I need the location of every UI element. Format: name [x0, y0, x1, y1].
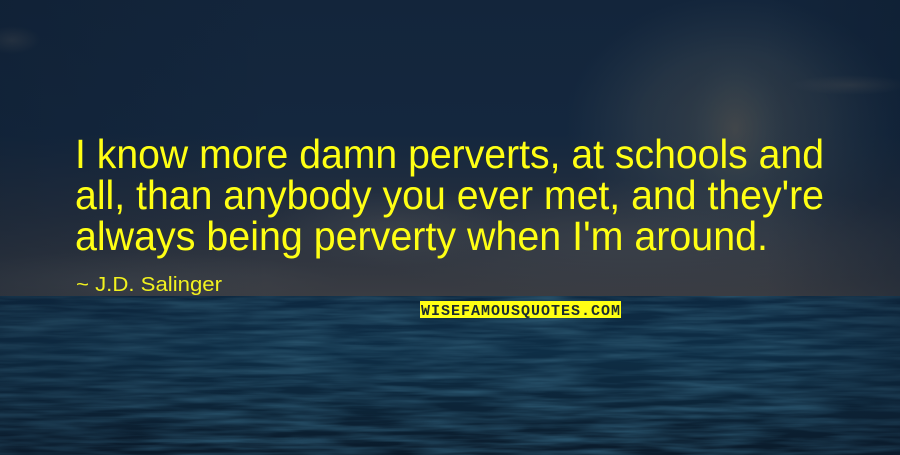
quote text: all, than anybody you ever met, and they're [75, 172, 824, 218]
author attribution: ~ J.D. Salinger [76, 274, 222, 296]
quote text: always being perverty when I'm around. [75, 213, 768, 259]
watermark badge: WISEFAMOUSQUOTES.COM [421, 303, 620, 320]
background: dusk sky [0, 0, 900, 312]
quote text: I know more damn perverts, at schools and [75, 131, 824, 177]
quote text [75, 131, 824, 259]
